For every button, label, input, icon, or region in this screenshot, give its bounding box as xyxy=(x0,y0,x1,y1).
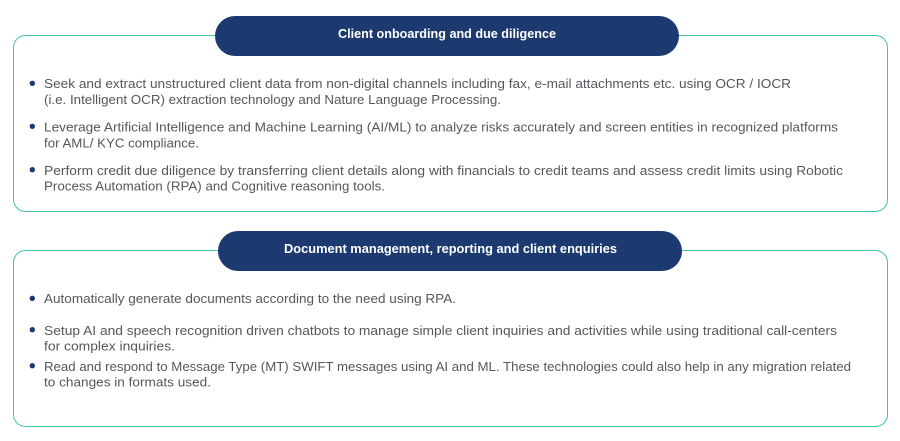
panel: client onboarding and due diligence xyxy=(14,16,888,212)
bullet: unstructured client data: Seek and extract unstructured client data from non-digital channels including fax, e-mail attachments etc. using OCR / IOCR xyxy=(44,76,791,91)
bullet: AI/ML risk analysis xyxy=(30,120,839,150)
bullet: chatbots xyxy=(30,323,838,353)
heading: document management, reporting and client enquiries xyxy=(218,231,682,271)
bullet: AI/ML risk analysis: for AML/ KYC compliance. xyxy=(44,135,199,150)
bullet: unstructured client data: (i.e. Intelligent OCR) extraction technology and Nature Language Processing. xyxy=(44,92,501,107)
bullet: SWIFT messages: Read and respond to Message Type (MT) SWIFT messages using AI and ML. These technologies could also help in any migration related xyxy=(44,359,851,374)
heading: client onboarding and due diligence: Client onboarding and due diligence xyxy=(338,26,556,41)
bullet: unstructured client data xyxy=(30,76,791,107)
bullet: chatbots: Setup AI and speech recognition driven chatbots to manage simple client inquiries and activities while using traditional call-centers xyxy=(44,323,838,338)
bullet: SWIFT messages: to changes in formats used. xyxy=(44,374,211,389)
bullet: generate documents: Automatically generate documents according to the need using RPA. xyxy=(44,291,456,306)
panel outline xyxy=(14,250,888,426)
heading: document management, reporting and client enquiries: Document management, reporting and client enquiries xyxy=(284,241,617,256)
bullet: chatbots: for complex inquiries. xyxy=(44,338,175,353)
bullet: SWIFT messages xyxy=(30,359,851,389)
bullet: credit due diligence: Perform credit due diligence by transferring client details along with financials to credit teams and assess credit limits using Robotic xyxy=(44,163,844,178)
bullet: credit due diligence: Process Automation (RPA) and Cognitive reasoning tools. xyxy=(44,179,385,194)
bullet: AI/ML risk analysis: Leverage Artificial Intelligence and Machine Learning (AI/ML) to analyze risks accurately and screen entities in recognized platforms xyxy=(44,120,839,134)
panel: document management, reporting and client enquiries xyxy=(14,231,888,426)
panel outline xyxy=(14,36,888,212)
bullet: credit due diligence xyxy=(30,163,844,194)
heading: client onboarding and due diligence xyxy=(215,16,679,56)
